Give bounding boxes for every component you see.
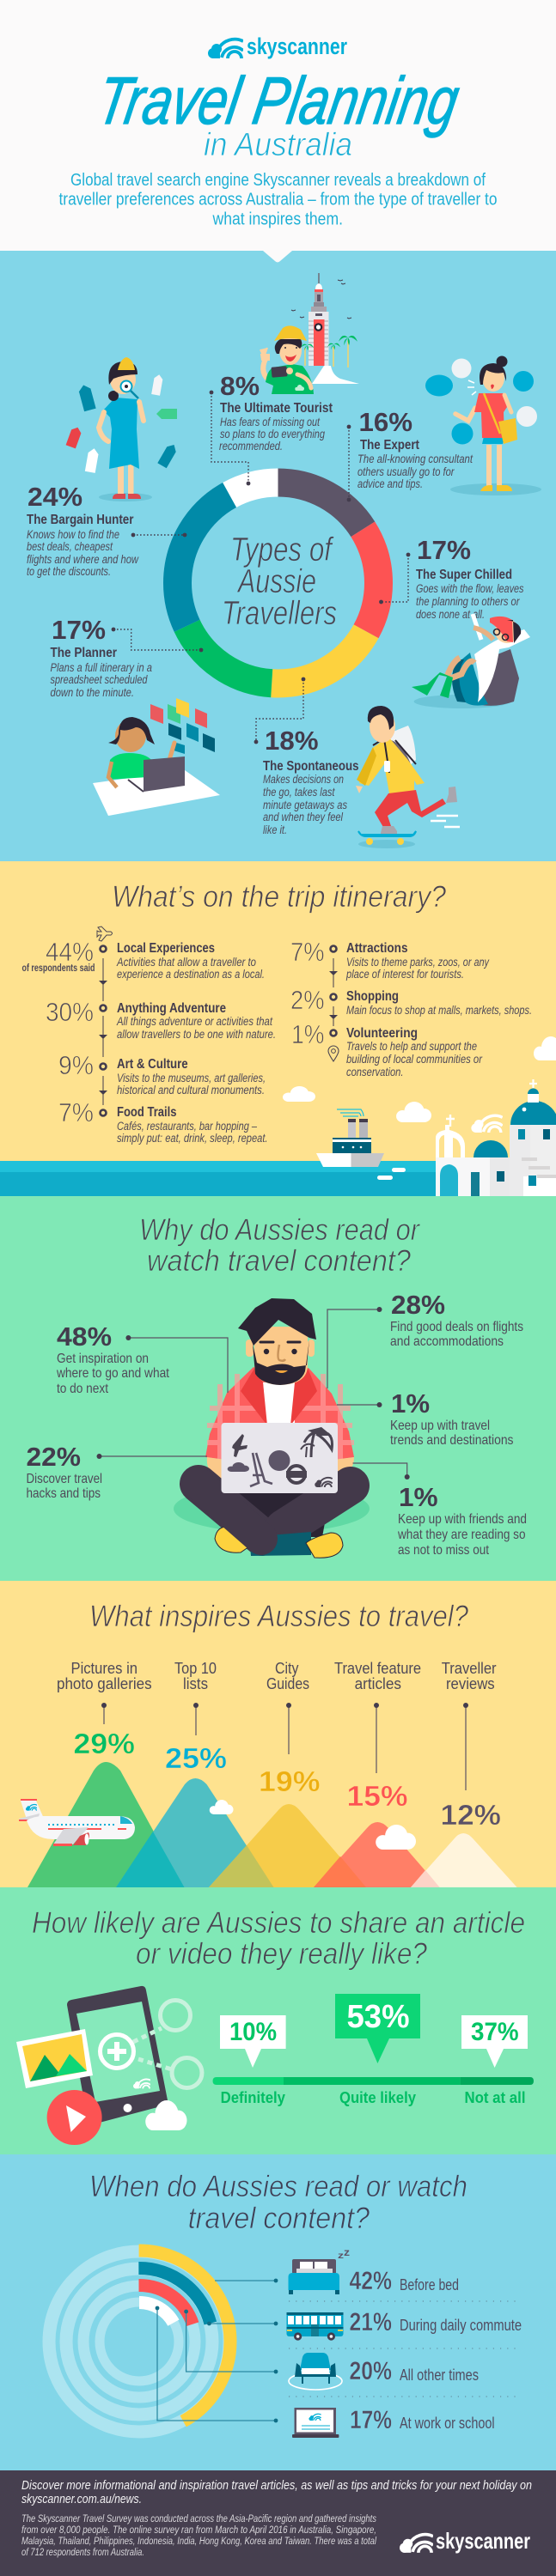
bubble: quite likely 53%: [335, 1994, 420, 2063]
callout: bargain hunter 24%: 24%: [27, 482, 82, 512]
item: pictures in photo galleries 29%: [57, 1660, 152, 1759]
item: city guides 19%: Guides: [266, 1675, 309, 1692]
heading: [89, 2170, 467, 2235]
timeline: left column: 30%: [46, 997, 94, 1027]
row: daily commute 21%: During daily commute: [400, 2317, 522, 2334]
heading: [32, 1906, 525, 1971]
callout: ultimate tourist 8%: The Ultimate Tourist: [220, 401, 333, 416]
item: travel feature articles 15%: articles: [355, 1675, 401, 1692]
item: attractions: Visits to theme parks, zoos, or any: [346, 956, 490, 969]
heading: What’s on the trip itinerary?: [112, 880, 446, 914]
item: volunteering: conservation.: [346, 1066, 404, 1078]
callout: bargain hunter 24%: Knows how to find the: [27, 528, 119, 541]
title: Travel Planning: [92, 64, 465, 138]
intro text: Global travel search engine Skyscanner reveals a breakdown of: [70, 170, 486, 190]
labels: scale: Definitely: [221, 2089, 285, 2106]
item: attractions: place of interest for tourists.: [345, 968, 464, 981]
heading: watch travel content?: [147, 1244, 411, 1278]
heading: Why do Aussies read or: [139, 1213, 420, 1247]
item: top 10 lists 25%: 25%: [165, 1742, 227, 1774]
heading: or video they really like?: [136, 1937, 427, 1971]
callout: 48% inspiration: [56, 1321, 228, 1396]
intro text: [58, 170, 497, 228]
row: work or school 17%: At work or school: [400, 2415, 495, 2432]
callout: 48% inspiration: to do next: [57, 1382, 108, 1396]
row: before bed 42%: Before bed: [400, 2276, 459, 2293]
bar: likelihood scale: [213, 2077, 534, 2085]
callout: planner 17%: 17%: [52, 615, 106, 645]
item: local experiences: Local Experiences: [117, 941, 215, 956]
item: city guides 19%: City: [275, 1660, 298, 1677]
callout: super chilled 17%: the planning to others or: [416, 595, 520, 608]
panel: footer: [0, 2470, 556, 2576]
panel: likelihood to share: [0, 1887, 556, 2154]
illustration: planner character with sticky notes: [93, 698, 220, 816]
callout: ultimate tourist 8%: 8%: [220, 371, 260, 401]
illustration: super chilled character: [412, 614, 530, 708]
illustration: ultimate tourist character: [260, 325, 314, 394]
item: art and culture: historical and cultural monuments.: [117, 1084, 265, 1097]
callout: expert 16%: [347, 407, 474, 501]
item: top 10 lists 25%: lists: [183, 1675, 208, 1692]
donut centre label: Aussie: [236, 563, 316, 600]
item: top 10 lists 25%: Top 10: [174, 1660, 217, 1677]
illustration: ship: [316, 1109, 384, 1167]
callout: 28% deals: and accommodations: [390, 1334, 504, 1349]
callout: 22% hacks: hacks and tips: [26, 1486, 101, 1501]
timeline: left column: of respondents said: [22, 963, 95, 974]
call to action text: skyscanner.com.au/news.: [21, 2492, 142, 2506]
timeline: right column: [290, 937, 339, 1061]
callout: super chilled 17%: [379, 535, 524, 621]
item: local experiences: Activities that allow a traveller to: [116, 956, 256, 969]
donut centre label: Travellers: [222, 595, 337, 632]
item: traveller reviews 12%: Traveller: [442, 1660, 497, 1677]
callout: 1% friends: as not to miss out: [398, 1543, 489, 1558]
item: volunteering: building of local communities or: [346, 1053, 482, 1066]
item: traveller reviews 12%: [440, 1660, 501, 1831]
mountains chart: [27, 1762, 517, 1887]
callout: spontaneous 18%: minute getaways as: [263, 799, 347, 811]
callout: 22% hacks: [26, 1442, 207, 1501]
row: work or school 17%: [292, 2406, 495, 2438]
item: shopping: Shopping: [346, 989, 399, 1004]
callout: planner 17%: Plans a full itinerary in a: [50, 661, 152, 674]
radial bar chart: [48, 2251, 230, 2433]
item: travel feature articles 15%: [334, 1660, 421, 1812]
timeline: left column: 7%: [58, 1097, 94, 1127]
icon: clouds: [283, 1036, 556, 1122]
callout: bargain hunter 24%: best deals, cheapest: [27, 540, 113, 553]
logo: skyscanner white: skyscanner: [436, 2528, 530, 2554]
heading: travel content?: [188, 2202, 370, 2235]
callout: bargain hunter 24%: flights and where and how: [27, 553, 139, 566]
survey note: from over 8,000 people. The online survey ran from March to April 2016 in Australia, Singapore,: [21, 2525, 376, 2536]
callout: bargain hunter 24%: [27, 482, 186, 578]
timeline: right column: 1%: [291, 1019, 325, 1049]
item: food trails: Cafés, restaurants, bar hopping –: [117, 1120, 257, 1133]
item: shopping: [346, 989, 532, 1017]
survey note: [21, 2514, 376, 2558]
callout: 28% deals: 28%: [391, 1290, 445, 1320]
illustration: sea: [0, 1161, 556, 1196]
item: pictures in photo galleries 29%: 29%: [73, 1728, 135, 1759]
callout: spontaneous 18%: The Spontaneous: [263, 759, 359, 774]
laptop with stickers: [222, 1423, 338, 1493]
survey note: Malaysia, Thailand, Philippines, Indonesia, India, Hong Kong, Korea and Taiwan. There was a total: [21, 2537, 376, 2547]
callout: 48% inspiration: Get inspiration on: [57, 1352, 149, 1366]
item: travel feature articles 15%: Travel feature: [334, 1660, 421, 1677]
row: daily commute 21%: 21%: [349, 2308, 392, 2336]
callout: bargain hunter 24%: The Bargain Hunter: [27, 513, 134, 527]
callout: planner 17%: spreadsheet scheduled: [50, 673, 148, 686]
callout: expert 16%: The Expert: [360, 438, 419, 453]
item: traveller reviews 12%: reviews: [446, 1675, 495, 1692]
heading: What inspires Aussies to travel?: [89, 1600, 468, 1633]
panel: types of aussie travellers: [0, 251, 556, 861]
row: before bed 42%: z: [344, 2246, 350, 2258]
survey note: of 712 respondents from Australia.: [21, 2548, 144, 2558]
callout: expert 16%: 16%: [359, 407, 412, 437]
item: attractions: Attractions: [346, 941, 407, 956]
callout: 28% deals: [327, 1290, 523, 1388]
labels: scale: Not at all: [464, 2089, 526, 2106]
callout: super chilled 17%: Goes with the flow, leaves: [416, 582, 524, 595]
item: local experiences: experience a destination as a local.: [117, 968, 265, 981]
callout: spontaneous 18%: Makes decisions on: [263, 773, 344, 786]
callout: super chilled 17%: does none at all.: [416, 608, 485, 621]
row: before bed 42%: z: [338, 2251, 344, 2261]
item: art and culture: Art & Culture: [117, 1057, 188, 1072]
callout: expert 16%: The all-knowing consultant: [357, 453, 474, 465]
callout: spontaneous 18%: and when they feel: [263, 811, 344, 823]
icon: plane outline: [97, 927, 112, 941]
row: work or school 17%: 17%: [350, 2406, 392, 2434]
timeline: right column: 7%: [290, 937, 325, 967]
item: food trails: [117, 1105, 268, 1145]
panel: when read or watch: [0, 2154, 556, 2470]
item: city guides 19%: [259, 1660, 321, 1797]
illustration: phone sharing: [16, 1986, 202, 2145]
item: volunteering: Travels to help and support the: [346, 1040, 477, 1053]
timeline: left column: [22, 937, 107, 1127]
callout: ultimate tourist 8%: [210, 371, 333, 485]
timeline: left column: 9%: [58, 1050, 94, 1080]
bubble: not at all 37%: 37%: [471, 2018, 519, 2046]
icon: clouds on mountains: [210, 1800, 416, 1850]
survey note: The Skyscanner Travel Survey was conducted across the Asia-Pacific region and gathered insights: [21, 2514, 376, 2524]
callout: planner 17%: The Planner: [50, 646, 117, 660]
item: local experiences: [116, 941, 265, 981]
logo: skyscanner white: [400, 2528, 530, 2554]
callout: 1% trends: Keep up with travel: [390, 1419, 490, 1433]
panel: why read or watch: [0, 1196, 556, 1581]
item: art and culture: Visits to the museums, art galleries,: [117, 1072, 266, 1084]
timeline: left column: 44%: [46, 937, 94, 967]
callout: super chilled 17%: The Super Chilled: [416, 568, 512, 582]
item: pictures in photo galleries 29%: photo galleries: [57, 1675, 152, 1692]
heading: When do Aussies read or watch: [89, 2170, 467, 2203]
callout: expert 16%: others usually go to for: [357, 465, 455, 478]
callout: ultimate tourist 8%: so plans to do everything: [220, 428, 325, 440]
row: other times 20%: 20%: [349, 2357, 392, 2385]
callout: 48% inspiration: where to go and what: [56, 1366, 169, 1381]
callout: planner 17%: [50, 615, 203, 699]
callout: spontaneous 18%: like it.: [263, 823, 287, 836]
item: attractions: [345, 941, 490, 981]
item: art and culture: [117, 1057, 266, 1097]
illustration: man with laptop: [174, 1298, 370, 1558]
icons: price tags: [66, 374, 179, 473]
panel: header: [0, 0, 556, 251]
callout: 1% friends: Keep up with friends and: [398, 1512, 527, 1527]
donut chart: [177, 483, 378, 683]
bubble: definitely 10%: [220, 2015, 286, 2068]
callout: spontaneous 18%: [254, 677, 359, 836]
row: other times 20%: All other times: [400, 2366, 479, 2384]
row: other times 20%: [289, 2353, 479, 2390]
callout: ultimate tourist 8%: Has fears of missing out: [220, 416, 321, 428]
callout: spontaneous 18%: 18%: [265, 726, 318, 756]
item: food trails: simply put: eat, drink, sleep, repeat.: [117, 1132, 268, 1145]
item: food trails: Food Trails: [117, 1105, 177, 1120]
item: city guides 19%: 19%: [259, 1765, 321, 1797]
donut centre label: [222, 532, 337, 632]
callout: 1% friends: 1%: [399, 1482, 438, 1512]
callout: spontaneous 18%: the go, takes last: [263, 786, 336, 799]
callout: 1% trends: 1%: [391, 1388, 430, 1419]
call to action text: [21, 2478, 532, 2506]
callout: planner 17%: down to the minute.: [50, 686, 134, 699]
bubble: definitely 10%: 10%: [229, 2018, 277, 2046]
illustration: bargain hunter character: [99, 357, 152, 501]
item: pictures in photo galleries 29%: Pictures in: [70, 1660, 137, 1677]
row: before bed 42%: 42%: [349, 2267, 392, 2295]
callout: bargain hunter 24%: to get the discounts.: [27, 565, 111, 578]
callout: 22% hacks: Discover travel: [26, 1472, 102, 1486]
callout: 48% inspiration: 48%: [57, 1321, 112, 1352]
item: anything adventure: All things adventure or activities that: [116, 1015, 273, 1028]
labels: scale: [221, 2089, 526, 2106]
callout: 1% trends: trends and destinations: [390, 1433, 514, 1448]
item: travel feature articles 15%: 15%: [347, 1780, 407, 1812]
illustration: clock tower and palms: [291, 273, 359, 384]
item: volunteering: [346, 1026, 482, 1078]
logo: skyscanner: skyscanner: [247, 33, 347, 59]
callout: 22% hacks: 22%: [26, 1442, 81, 1472]
callout: 1% trends: [337, 1388, 514, 1448]
donut centre label: Types of: [230, 532, 334, 568]
illustration: santorini buildings: [436, 1079, 556, 1196]
row: daily commute 21%: [287, 2308, 522, 2341]
callout: 1% friends: [352, 1463, 527, 1558]
item: anything adventure: Anything Adventure: [117, 1001, 226, 1016]
illustration: expert character with speech bubbles: [425, 355, 541, 495]
intro text: what inspires them.: [212, 209, 343, 228]
logo: skyscanner: [208, 33, 347, 59]
bubble: not at all 37%: [461, 2015, 528, 2068]
illustration: aeroplane: [19, 1799, 135, 1846]
panel: what inspires: [0, 1581, 556, 1887]
callout: ultimate tourist 8%: recommended.: [219, 440, 283, 453]
item: top 10 lists 25%: [165, 1660, 227, 1774]
item: volunteering: Volunteering: [346, 1026, 418, 1041]
callout: expert 16%: advice and tips.: [357, 477, 423, 490]
item: anything adventure: [116, 1001, 276, 1041]
callout: 1% friends: what they are reading so: [397, 1528, 526, 1542]
labels: scale: Quite likely: [339, 2089, 416, 2106]
callout: 28% deals: Find good deals on flights: [390, 1320, 523, 1334]
heading: [139, 1213, 420, 1278]
timeline: right column: 2%: [290, 985, 325, 1015]
callout: super chilled 17%: 17%: [417, 535, 471, 565]
illustration: spontaneous skateboarder: [356, 706, 460, 848]
item: traveller reviews 12%: 12%: [440, 1799, 501, 1831]
row: before bed 42%: [289, 2246, 459, 2295]
subtitle: in Australia: [204, 127, 352, 163]
bubble: quite likely 53%: 53%: [347, 1999, 409, 2035]
connector lines: [156, 2279, 278, 2422]
item: anything adventure: allow travellers to be one with nature.: [117, 1028, 276, 1041]
panel: trip itinerary: [0, 861, 556, 1196]
